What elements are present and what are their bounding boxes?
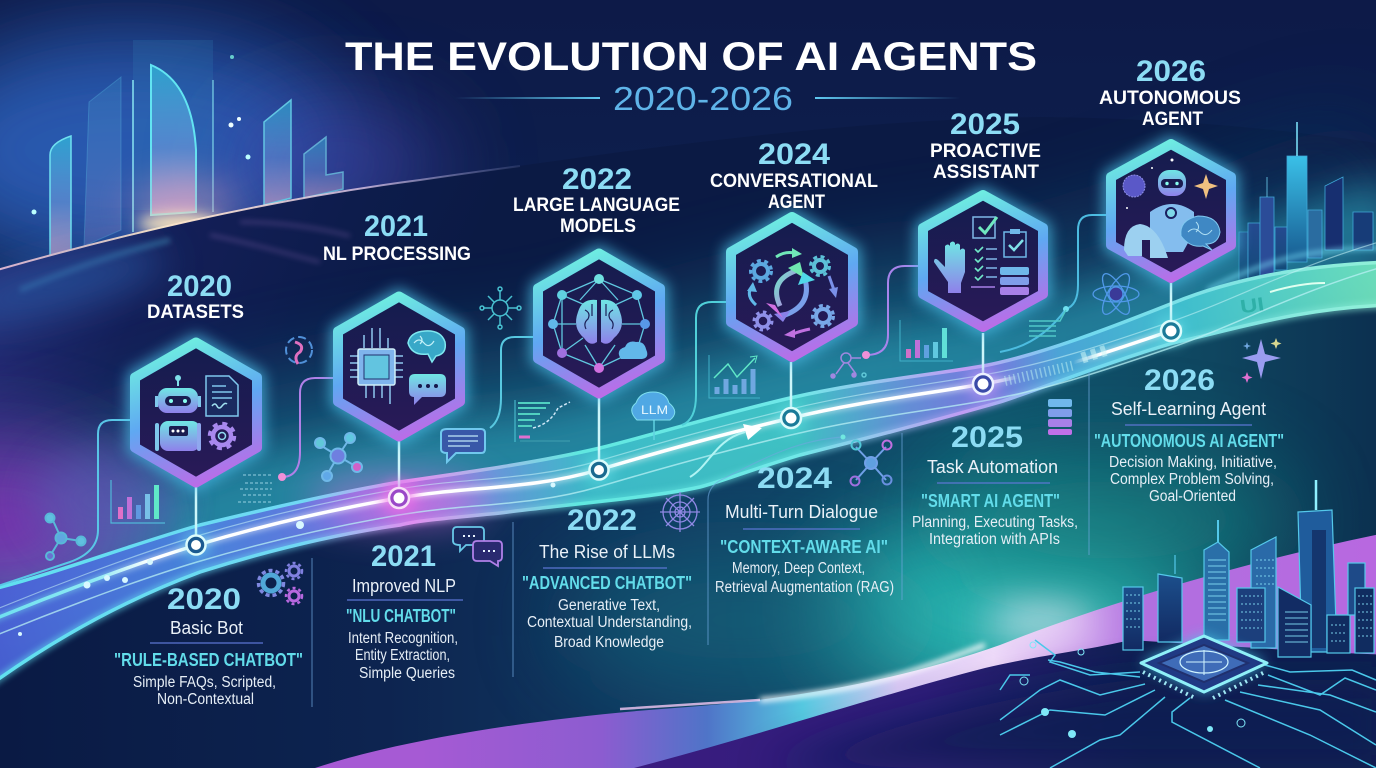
bottom block 2020: Non-Contextual [157,691,254,708]
top label 2025: ASSISTANT [933,162,1039,183]
node 2026 [1157,317,1185,345]
horizon glow [130,180,240,234]
icon: brain [408,331,445,362]
decorative icon: molecule, far left [46,514,86,560]
icon: gears [750,256,834,330]
icon: LLM cloud [632,392,675,440]
bottom block 2025: "SMART AI AGENT" [921,491,1060,511]
bottom block 2021: Intent Recognition, [348,630,458,647]
bottom block 2021: Entity Extraction, [355,647,450,664]
icon: checklist [971,247,997,287]
icon: web network 2022 [660,492,700,532]
icon: brain [1181,216,1220,250]
top label 2026 [1099,55,1241,130]
bottom block 2024 [715,462,894,596]
dividers [312,372,1089,707]
top label 2024: CONVERSATIONAL [710,171,878,192]
top label 2026: 2026 [1136,55,1206,88]
connector end dots [278,306,1069,481]
skyline glow streak [1207,248,1376,290]
sub-heading rules [150,425,1252,643]
hexagon 2026: autonomous robot icons [1111,144,1231,278]
bottom block 2025: Planning, Executing Tasks, [912,514,1078,531]
node 2024 [777,404,805,432]
top label 2024: AGENT [768,192,825,213]
top label 2022 [513,163,680,237]
lower hill [315,532,1376,768]
icon: database 2025 [1048,399,1072,435]
bottom block 2022: The Rise of LLMs [539,542,675,562]
node 2021 [382,481,416,515]
bottom block 2026: Complex Problem Solving, [1110,471,1274,488]
icon: checkbox [973,217,997,238]
icon: node graph 2024 [831,353,866,378]
bottom block 2020: "RULE-BASED CHATBOT" [114,650,303,670]
icon: swirl symbol [286,337,312,364]
bottom block 2021 [346,540,458,682]
chip with brain [1141,636,1267,698]
icon: network 2022 [480,287,521,329]
skyline windows [1126,560,1372,642]
lower background field [0,280,1376,768]
icon: chat bubble [409,374,446,405]
ribbon tag: UI [1239,294,1266,318]
icon: gears 2020 [258,563,302,604]
icon: hand [934,242,965,293]
icon: list lines 2025 [1029,310,1066,336]
top label 2022: 2022 [562,163,632,196]
top label 2022: LARGE LANGUAGE [513,195,680,216]
glowing ribbon dots [18,482,556,636]
icon: nodes 2024 [850,440,892,486]
top label 2026: AUTONOMOUS [1099,88,1241,109]
title: THE EVOLUTION OF AI AGENTS [345,35,1037,79]
light wisps [20,222,350,290]
stems and timeline nodes [182,283,1185,559]
icon: cycling arrows [747,248,838,338]
top label 2021: 2021 [364,210,428,243]
bottom block 2020: Simple FAQs, Scripted, [133,674,276,691]
bottom block 2021: Simple Queries [359,665,455,682]
top label 2025 [930,108,1041,183]
hexagon 2021: NLP icons [338,296,460,436]
icon: sparkle [1194,174,1218,199]
top label 2022: MODELS [560,216,636,237]
bottom block 2021: "NLU CHATBOT" [346,606,456,626]
bottom block 2022: "ADVANCED CHATBOT" [522,573,692,593]
icon: bar chart 2025 [900,320,953,361]
top label 2025: 2025 [950,108,1020,141]
bottom block 2022: Broad Knowledge [554,634,664,651]
horizon line [0,166,520,272]
top label 2024: 2024 [758,138,830,171]
top label 2020: DATASETS [147,302,244,323]
bottom block 2022 [522,504,692,651]
node 2022 [585,456,613,484]
bottom block 2024: Memory, Deep Context, [732,560,865,577]
bottom block 2026: Goal-Oriented [1149,488,1236,505]
icon: server stack [1000,267,1029,295]
top label 2021 [323,210,471,265]
bottom block 2024: "CONTEXT-AWARE AI" [720,537,888,557]
bottom-right skyline [1123,480,1374,657]
connector lines [0,215,1108,587]
icon: data dashes 2021 [238,475,272,502]
icon: speech bubble 2021 [441,429,485,462]
node 2025 [968,369,998,399]
top label 2025: PROACTIVE [930,141,1041,162]
bottom block 2024: 2024 [757,462,832,495]
bottom block 2025: Task Automation [927,457,1058,477]
icon: robot [1124,158,1194,258]
icon: robot head [155,375,201,413]
icon: brain [576,300,622,344]
subtitle: 2020-2026 [613,80,793,117]
bottom block 2021: Improved NLP [352,576,456,596]
circuit traces [1000,640,1376,768]
bottom block 2026: Self-Learning Agent [1111,399,1266,419]
icon: document [206,376,238,416]
bottom block 2026: Decision Making, Initiative, [1109,454,1277,471]
bottom block 2025: 2025 [951,421,1023,454]
icon: clipboard [1004,229,1026,257]
circuit nodes [1020,642,1245,738]
hexagon 2022: large language model icons [538,254,660,394]
icon: LLM cloud: LLM [641,403,668,417]
top label 2020 [147,270,244,323]
left glass city skyline [32,40,343,256]
icon: chat bubbles 2021 [453,527,502,566]
bottom block 2024: Retrieval Augmentation (RAG) [715,579,894,596]
bottom block 2026 [1094,364,1284,505]
icon: bar chart 2020 [111,480,165,523]
top label 2024 [710,138,878,213]
bottom block 2020: Basic Bot [170,618,243,638]
right skyline [1239,122,1373,280]
bottom block 2022: Contextual Understanding, [527,614,692,631]
icon: line chart 2024 [709,355,760,398]
icon: atom [1093,270,1139,318]
top label 2026: AGENT [1142,109,1203,130]
bottom block 2022: 2022 [567,504,637,537]
icon: neural network [548,274,650,373]
icon: gear [210,424,234,448]
hexagon 2024: context cycle icons [731,217,853,357]
hexagon 2020: basic bot icons [135,342,257,482]
bottom block 2025 [912,421,1078,548]
bottom block 2026: "AUTONOMOUS AI AGENT" [1094,431,1284,451]
bottom block 2020: 2020 [167,583,241,616]
ribbon ambient glow [0,221,1376,610]
top label 2020: 2020 [167,270,232,303]
icon: robot body [155,421,201,451]
icon: line chart 2022 [515,400,570,442]
icon: sparkles 2026 [1242,338,1282,383]
bottom block 2025: Integration with APIs [929,531,1060,548]
icon: processor chip [350,328,403,404]
bottom block 2021: 2021 [371,540,436,573]
icon: orb [1123,175,1145,197]
icon: molecule 2021 [315,433,362,481]
timeline ribbon [0,236,1376,685]
bottom block 2026: 2026 [1144,364,1215,397]
bottom block 2022: Generative Text, [558,597,660,614]
icon: cloud [619,342,647,359]
bottom block 2020 [114,583,303,708]
hexagon 2025: task automation icons [923,195,1043,327]
bottom block 2024: Multi-Turn Dialogue [725,502,878,522]
node 2020 [182,531,210,559]
top label 2021: NL PROCESSING [323,244,471,265]
